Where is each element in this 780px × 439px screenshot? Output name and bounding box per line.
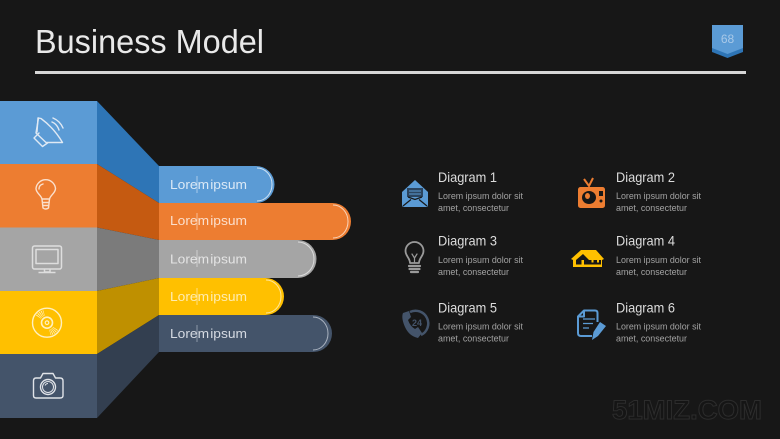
text: diagram 5 xyxy=(438,300,523,344)
icon: bulb xyxy=(406,242,424,272)
text: diagram 6: amet, consectetur xyxy=(616,334,687,344)
bar: orange: Lorem ipsum xyxy=(170,213,247,228)
text: diagram 3 xyxy=(438,232,523,277)
bar: yellow xyxy=(159,278,284,315)
text: diagram 5: amet, consectetur xyxy=(438,334,509,344)
icon: document and pen xyxy=(578,310,606,340)
text: diagram 4 xyxy=(616,232,701,277)
bars xyxy=(159,166,351,352)
icon: disc xyxy=(32,308,62,337)
page badge: 68 xyxy=(721,32,734,46)
bar: gray: Lorem ipsum xyxy=(170,252,247,266)
funnel graphic xyxy=(0,101,159,418)
bar: blue: Lorem ipsum xyxy=(170,177,247,192)
text: diagram 4: Diagram 4 xyxy=(616,232,675,248)
bar: navy xyxy=(159,315,332,352)
text: diagram 1: amet, consectetur xyxy=(438,203,509,213)
bar: navy: Lorem ipsum xyxy=(170,326,247,341)
icon: 24h phone: 24 xyxy=(412,318,422,328)
bar: yellow: Lorem ipsum xyxy=(170,289,247,304)
bar: gray xyxy=(159,240,316,278)
page badge xyxy=(712,25,743,58)
front block: gray xyxy=(0,228,97,291)
front block: blue xyxy=(0,101,97,164)
text: diagram 2: Diagram 2 xyxy=(616,169,675,185)
text: diagram 3: Lorem ipsum dolor sit xyxy=(438,255,523,265)
watermark: 51MIZ.COM xyxy=(612,395,762,425)
icon: monitor xyxy=(32,246,62,272)
text: diagram 3: amet, consectetur xyxy=(438,267,509,277)
text: diagram 4: Lorem ipsum dolor sit xyxy=(616,255,701,265)
title: Business Model xyxy=(35,23,264,60)
text: diagram 6: Diagram 6 xyxy=(616,300,675,316)
text: diagram 1: Lorem ipsum dolor sit xyxy=(438,191,523,201)
front block: orange xyxy=(0,164,97,228)
text: diagram 2: amet, consectetur xyxy=(616,203,687,213)
text: diagram 1 xyxy=(438,169,523,213)
side faces xyxy=(97,101,159,418)
text: diagram 4: amet, consectetur xyxy=(616,267,687,277)
text: diagram 6 xyxy=(616,300,701,344)
icon: tv xyxy=(578,178,605,208)
text: diagram 2: Lorem ipsum dolor sit xyxy=(616,191,701,201)
icon: envelope xyxy=(402,180,428,207)
text: diagram 2 xyxy=(616,169,701,213)
title underline xyxy=(35,71,746,74)
text: diagram 5: Lorem ipsum dolor sit xyxy=(438,322,523,332)
icon: house xyxy=(571,250,604,267)
icon: light bulb xyxy=(36,180,56,209)
text: diagram 6: Lorem ipsum dolor sit xyxy=(616,322,701,332)
bar: orange xyxy=(159,203,351,240)
text: diagram 1: Diagram 1 xyxy=(438,169,497,185)
bar: blue xyxy=(159,166,274,203)
text: diagram 3: Diagram 3 xyxy=(438,232,497,248)
icon: camera xyxy=(34,374,63,398)
text: diagram 5: Diagram 5 xyxy=(438,300,497,316)
front block: navy xyxy=(0,354,97,418)
icon: 24h phone xyxy=(402,311,428,338)
icon: speaker xyxy=(34,118,63,146)
front block: yellow xyxy=(0,291,97,354)
